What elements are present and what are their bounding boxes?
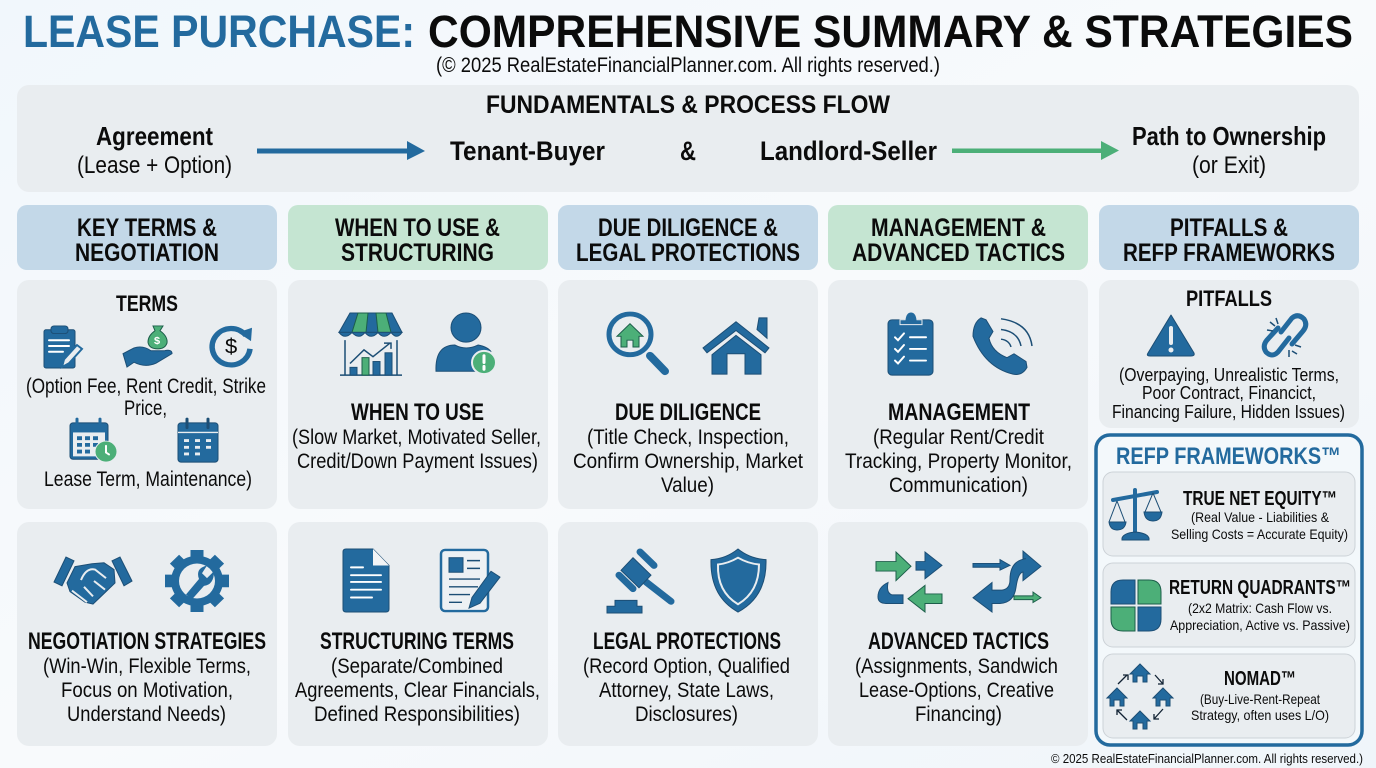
flow step: agreement: (Lease + Option) bbox=[77, 152, 232, 179]
card: return quadrants: (2x2 Matrix: Cash Flow vs. bbox=[1188, 600, 1332, 616]
panel: advanced tactics bbox=[828, 522, 1088, 746]
panel: legal protections bbox=[558, 522, 818, 746]
icon: circular dollar arrow: $ bbox=[225, 335, 237, 358]
flow step: agreement: Agreement bbox=[96, 121, 213, 151]
icon: hand holding money bag: $ bbox=[154, 335, 160, 347]
arrow: green bbox=[952, 141, 1119, 160]
icon: hand holding money bag bbox=[123, 326, 172, 367]
column header: key terms and negotiation bbox=[17, 205, 277, 270]
text: due diligence details bbox=[573, 426, 803, 497]
column header: pitfalls and frameworks: REFP FRAMEWORKS bbox=[1123, 239, 1335, 267]
panel: due diligence bbox=[558, 280, 818, 509]
text: structuring details: Defined Responsibilities) bbox=[314, 703, 520, 726]
text: structuring details bbox=[295, 655, 540, 726]
icon: crossing route arrows bbox=[973, 551, 1041, 612]
icon: warning triangle bbox=[1147, 315, 1194, 356]
icon: quadrant matrix bbox=[1111, 580, 1161, 631]
icon: exchange arrows bbox=[876, 552, 942, 612]
text: due diligence details: Value) bbox=[661, 474, 714, 497]
card: nomad: NOMAD™ bbox=[1224, 668, 1296, 690]
column header: when to use and structuring bbox=[288, 205, 548, 270]
card: nomad: (Buy-Live-Rent-Repeat bbox=[1200, 691, 1320, 707]
panel: terms bbox=[17, 280, 277, 509]
text: negotiation details: Understand Needs) bbox=[67, 703, 226, 726]
icon: checklist clipboard bbox=[888, 312, 933, 375]
panel: management bbox=[828, 280, 1088, 509]
column header: management and advanced tactics bbox=[828, 205, 1088, 270]
panel: negotiation strategies bbox=[17, 522, 277, 746]
icon: telephone with signal bbox=[973, 318, 1032, 374]
icon: magnifier over house bbox=[609, 314, 665, 371]
icon: person with alert badge bbox=[436, 313, 496, 374]
icon: balance scale bbox=[1109, 490, 1162, 540]
column header: key terms and negotiation: NEGOTIATION bbox=[75, 239, 219, 267]
flow step: parties bbox=[450, 136, 937, 166]
column header: due diligence and legal protections: DUE DILIGENCE & bbox=[598, 214, 778, 242]
icon: gavel bbox=[607, 552, 671, 613]
flow step: parties: Tenant-Buyer bbox=[450, 136, 605, 166]
text: when to use details bbox=[292, 426, 541, 473]
text: pitfalls details: Poor Contract, Financict, bbox=[1142, 383, 1316, 403]
column header: when to use and structuring: STRUCTURING bbox=[341, 239, 494, 267]
card: nomad: Strategy, often uses L/O) bbox=[1191, 707, 1329, 723]
heading: management: MANAGEMENT bbox=[888, 399, 1030, 426]
heading: terms: TERMS bbox=[116, 291, 178, 316]
text: when to use details: (Slow Market, Motivated Seller, bbox=[292, 426, 541, 449]
column header: pitfalls and frameworks bbox=[1099, 205, 1359, 270]
icon: gear with wrench bbox=[165, 550, 229, 612]
text: pitfalls details: Financing Failure, Hidden Issues) bbox=[1112, 402, 1345, 422]
icon: form with pencil bbox=[441, 550, 500, 611]
column header: management and advanced tactics: MANAGEMENT & bbox=[871, 214, 1046, 242]
text: negotiation details bbox=[43, 655, 251, 726]
text: management details: Communication) bbox=[889, 474, 1028, 497]
heading: when to use: WHEN TO USE bbox=[351, 399, 484, 426]
panel: structuring terms bbox=[288, 522, 548, 746]
icon: house bbox=[703, 318, 769, 374]
card: true net equity: (Real Value - Liabilities & bbox=[1191, 509, 1330, 525]
icon: circular dollar arrow bbox=[212, 328, 252, 365]
card: true net equity bbox=[1103, 472, 1355, 556]
arrow: blue bbox=[257, 141, 425, 160]
icon: storefront with growth chart bbox=[339, 313, 402, 375]
card: return quadrants: Appreciation, Active vs. Passive) bbox=[1170, 617, 1350, 633]
column header: due diligence and legal protections bbox=[558, 205, 818, 270]
text: structuring details: (Separate/Combined bbox=[331, 655, 503, 678]
heading: fundamentals: FUNDAMENTALS & PROCESS FLOW bbox=[486, 91, 890, 119]
heading: negotiation strategies: NEGOTIATION STRATEGIES bbox=[28, 628, 266, 655]
heading: advanced tactics: ADVANCED TACTICS bbox=[868, 628, 1049, 655]
text: structuring details: Agreements, Clear Financials, bbox=[295, 679, 540, 702]
text: when to use details: Credit/Down Payment Issues) bbox=[297, 450, 538, 473]
icon: calendar bbox=[178, 419, 218, 462]
text: advanced tactics details: Financing) bbox=[915, 703, 1002, 726]
column header: key terms and negotiation: KEY TERMS & bbox=[77, 214, 217, 242]
column header: when to use and structuring: WHEN TO USE & bbox=[335, 214, 500, 242]
icon: document bbox=[343, 549, 389, 612]
text: management details: (Regular Rent/Credit bbox=[873, 426, 1044, 449]
text: pitfalls details: (Overpaying, Unrealistic Terms, bbox=[1119, 365, 1339, 385]
text: negotiation details: Focus on Motivation, bbox=[61, 679, 233, 702]
text: due diligence details: Confirm Ownership, Market bbox=[573, 450, 803, 473]
icon: broken chain link bbox=[1264, 316, 1306, 357]
text: terms line 1: (Option Fee, Rent Credit, Strike bbox=[26, 375, 266, 398]
panel: refp frameworks bbox=[1096, 435, 1362, 745]
card: return quadrants bbox=[1103, 563, 1355, 647]
icon: cycle of houses bbox=[1107, 664, 1173, 729]
icon: shield bbox=[711, 549, 766, 612]
flow step: path to ownership bbox=[1132, 121, 1326, 179]
text: terms line 3: Lease Term, Maintenance) bbox=[44, 468, 252, 491]
text: pitfalls details bbox=[1112, 365, 1345, 422]
title bbox=[23, 6, 1353, 57]
text: advanced tactics details: (Assignments, Sandwich bbox=[855, 655, 1058, 678]
text: terms line 2: Price, bbox=[124, 397, 167, 420]
text: legal details bbox=[583, 655, 790, 726]
heading: due diligence: DUE DILIGENCE bbox=[615, 399, 761, 426]
text: advanced tactics details: Lease-Options, Creative bbox=[859, 679, 1054, 702]
text: legal details: Attorney, State Laws, bbox=[599, 679, 774, 702]
text: legal details: (Record Option, Qualified bbox=[583, 655, 790, 678]
flow step: path to ownership: Path to Ownership bbox=[1132, 121, 1326, 151]
text: management details: Tracking, Property Monitor, bbox=[845, 450, 1072, 473]
text: legal details: Disclosures) bbox=[635, 703, 738, 726]
flow step: parties: & bbox=[680, 136, 696, 166]
flow step: agreement bbox=[77, 121, 232, 179]
panel: fundamentals and process flow bbox=[17, 85, 1359, 192]
column header: management and advanced tactics: ADVANCED TACTICS bbox=[852, 239, 1065, 267]
subtitle: (© 2025 RealEstateFinancialPlanner.com. All rights reserved.) bbox=[436, 54, 940, 77]
text: due diligence details: (Title Check, Inspection, bbox=[587, 426, 789, 449]
card: nomad bbox=[1103, 654, 1355, 738]
panel: pitfalls bbox=[1099, 280, 1359, 428]
column header: pitfalls and frameworks: PITFALLS & bbox=[1170, 214, 1288, 242]
card: true net equity: Selling Costs = Accurate Equity) bbox=[1171, 526, 1348, 542]
text: management details bbox=[845, 426, 1072, 497]
heading: legal protections: LEGAL PROTECTIONS bbox=[593, 628, 781, 655]
heading: structuring terms: STRUCTURING TERMS bbox=[320, 628, 514, 655]
flow step: path to ownership: (or Exit) bbox=[1192, 152, 1266, 179]
title: LEASE PURCHASE: bbox=[23, 6, 415, 57]
icon: calendar with clock bbox=[70, 419, 117, 462]
panel: when to use bbox=[288, 280, 548, 509]
text: negotiation details: (Win-Win, Flexible Terms, bbox=[43, 655, 251, 678]
text: advanced tactics details bbox=[855, 655, 1058, 726]
icon: handshake bbox=[54, 557, 132, 604]
flow step: parties: Landlord-Seller bbox=[760, 136, 937, 166]
heading: pitfalls: PITFALLS bbox=[1186, 286, 1272, 311]
icon: clipboard with pencil bbox=[44, 326, 82, 368]
column header: due diligence and legal protections: LEGAL PROTECTIONS bbox=[576, 239, 800, 267]
